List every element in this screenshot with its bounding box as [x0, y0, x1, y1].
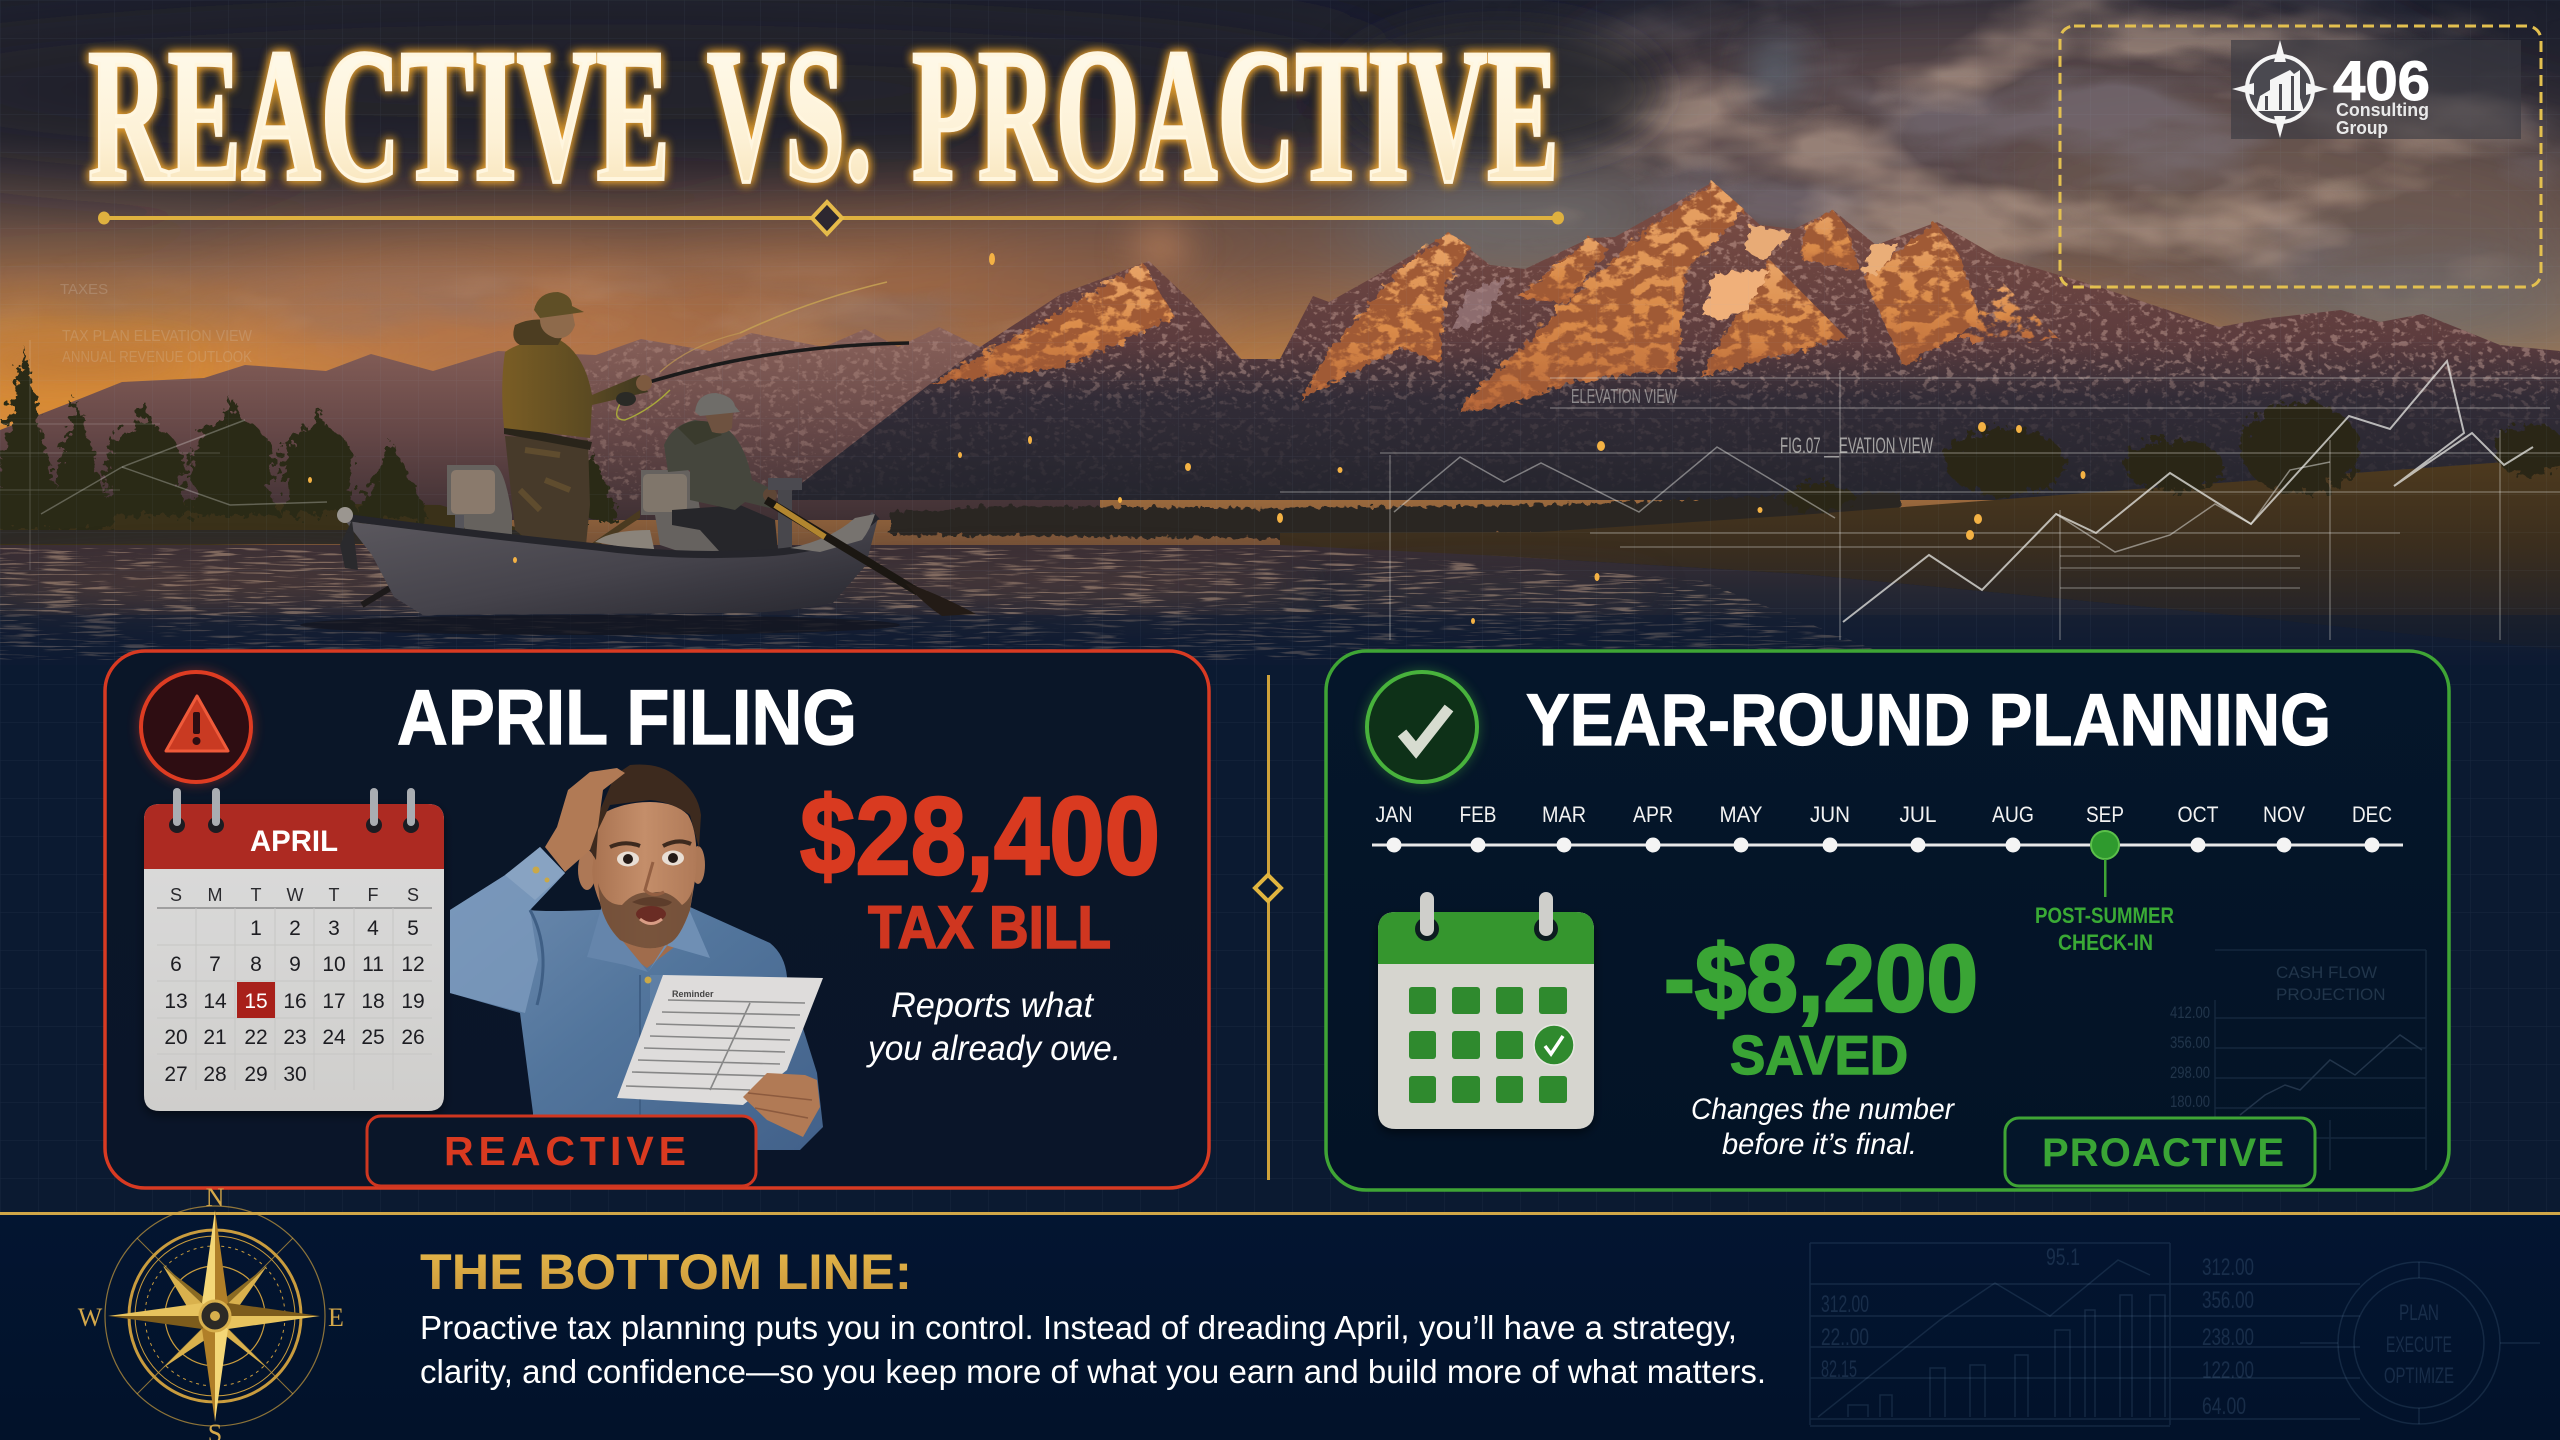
- bottom line band: 22..00: [1821, 1324, 1869, 1351]
- monthly timeline: JUL: [1900, 802, 1936, 827]
- blueprint labels on landscape: ANNUAL REVENUE OUTLOOK: [62, 349, 252, 366]
- front seat: [641, 470, 730, 555]
- tag: proactive: PROACTIVE: [2042, 1131, 2284, 1175]
- calendar: April with the 15th highlighted: 14: [203, 990, 227, 1013]
- background: sunset sky: [0, 0, 2560, 560]
- background: main mountain range: [780, 182, 2560, 500]
- bottom line band: 312.00: [2202, 1254, 2254, 1281]
- background: left shore trees: [0, 345, 620, 548]
- caption: reports what you already owe: you already owe.: [866, 1029, 1121, 1068]
- eyes and brows: [610, 841, 691, 866]
- calendar: April with the 15th highlighted: 20: [164, 1026, 188, 1049]
- calendar: April with the 15th highlighted: 10: [322, 953, 346, 976]
- face: [592, 802, 696, 948]
- rear seat: [447, 465, 512, 545]
- bottom line band: 312.00: [1821, 1291, 1869, 1318]
- heading: April filing: APRIL FILING: [397, 673, 857, 761]
- collar: [587, 905, 648, 972]
- calendar: April with the 15th highlighted: 28: [203, 1063, 227, 1086]
- calendar: April with the 15th highlighted: M: [208, 885, 222, 905]
- faint cash flow projection chart: 298.00: [2170, 1063, 2210, 1082]
- beard stubble: [598, 883, 693, 948]
- monthly timeline: NOV: [2263, 802, 2305, 827]
- oar left stub: [362, 585, 395, 605]
- calendar: April with the 15th highlighted: 26: [401, 1026, 425, 1049]
- floating ember sparkles: [308, 253, 2086, 624]
- text: bottom line message: Proactive tax planning puts you in control. Instead of dreading April, you’ll have a strategy,: [420, 1309, 1737, 1346]
- icon: compass with bar chart: [2232, 40, 2328, 138]
- calendar: April with the 15th highlighted: 22: [244, 1026, 268, 1049]
- calendar: April with the 15th highlighted: 5: [407, 917, 419, 940]
- blueprint labels on landscape: [60, 281, 1933, 458]
- logo placeholder dashed frame: [2060, 26, 2541, 287]
- faint cash flow projection chart: CASH FLOW: [2276, 963, 2377, 982]
- calendar: April with the 15th highlighted: 24: [322, 1026, 346, 1049]
- calendar: April with the 15th highlighted: 11: [362, 953, 384, 976]
- calendar: April with the 15th highlighted: 8: [250, 953, 262, 976]
- stat: amount saved: -$8,200: [1664, 926, 1978, 1032]
- faint cash flow projection chart: 356.00: [2170, 1033, 2210, 1052]
- tax form: Reminder: [672, 989, 714, 999]
- panel: April filing (reactive): [105, 651, 1209, 1188]
- icon: gold compass rose: E: [328, 1303, 344, 1332]
- monthly timeline: JUN: [1810, 802, 1850, 827]
- fishing rod: [646, 343, 909, 383]
- sunlit rock highlights: [930, 182, 2060, 410]
- tag: reactive: [367, 1116, 756, 1186]
- calendar: April with the 15th highlighted: 19: [401, 990, 425, 1013]
- callout: post-summer check-in: POST-SUMMER: [2035, 903, 2174, 928]
- caption: changes the number before it's final: [1691, 1093, 1955, 1161]
- calendar: April with the 15th highlighted: 15: [244, 990, 268, 1013]
- illustration: stressed man reading tax form: [450, 764, 823, 1150]
- calendar: April with the 15th highlighted: 2: [289, 917, 301, 940]
- blueprint labels on landscape: ELEVATION VIEW: [1571, 386, 1677, 408]
- calendar: April with the 15th highlighted: 3: [328, 917, 340, 940]
- monthly timeline: SEP: [2086, 802, 2124, 827]
- bottom line band: [0, 1183, 2560, 1440]
- faint cash flow projection chart: [2170, 950, 2426, 1170]
- faint financial blueprint drawings: [1810, 1243, 2540, 1426]
- calendar: green year-round: [1378, 892, 1594, 1129]
- shirt: [450, 847, 823, 1150]
- icon: warning triangle badge: [139, 670, 253, 784]
- calendar: April with the 15th highlighted: APRIL: [250, 825, 338, 858]
- faint cash flow projection chart: PROJECTION: [2276, 985, 2386, 1004]
- nose and mouth: [645, 862, 664, 895]
- calendar: April with the 15th highlighted: 25: [361, 1026, 385, 1049]
- bottom line band: EXECUTE: [2386, 1332, 2452, 1357]
- text: bottom line message: [420, 1309, 1766, 1390]
- bottom line band: 122.00: [2202, 1357, 2254, 1384]
- calendar: April with the 15th highlighted: 1: [250, 917, 262, 940]
- tag: proactive: [2005, 1118, 2315, 1186]
- oar: [766, 500, 976, 616]
- calendar: April with the 15th highlighted: 21: [203, 1026, 227, 1049]
- calendar: April with the 15th highlighted: 23: [283, 1026, 307, 1049]
- calendar: April with the 15th highlighted: [144, 788, 444, 1111]
- caption: changes the number before it's final: before it’s final.: [1722, 1128, 1917, 1161]
- seated angler: [664, 393, 802, 552]
- blueprint chart overlay on landscape: [0, 340, 2560, 640]
- icon: gold compass rose: [78, 1183, 344, 1440]
- stat label: saved: SAVED: [1730, 1024, 1908, 1086]
- monthly timeline: DEC: [2352, 802, 2392, 827]
- monthly timeline: MAR: [1542, 802, 1586, 827]
- calendar: April with the 15th highlighted: 27: [164, 1063, 188, 1086]
- logo: 406 Consulting Group: 406: [2333, 49, 2430, 112]
- background: right shore trees: [1782, 402, 2560, 511]
- calendar: April with the 15th highlighted: 9: [289, 953, 301, 976]
- bottom line band: 82.15: [1821, 1356, 1857, 1383]
- logo: 406 Consulting Group: [2231, 40, 2521, 139]
- blueprint labels on landscape: TAXES: [60, 281, 108, 298]
- hand on hair: [545, 768, 625, 872]
- calendar: April with the 15th highlighted: 30: [283, 1063, 307, 1086]
- tax form: [617, 975, 823, 1105]
- bottom line band: 95.1: [2046, 1244, 2080, 1271]
- calendar: April with the 15th highlighted: 13: [164, 990, 188, 1013]
- text: bottom line message: clarity, and confidence—so you keep more of what you earn and build more of what matters.: [420, 1353, 1766, 1390]
- calendar: April with the 15th highlighted: S: [170, 885, 182, 905]
- ears: [578, 850, 594, 890]
- icon: check mark badge: [1365, 670, 1479, 784]
- bottom line band: 238.00: [2202, 1324, 2254, 1351]
- calendar: April with the 15th highlighted: W: [286, 885, 304, 905]
- stat label: tax bill: TAX BILL: [868, 894, 1111, 961]
- hair: [590, 764, 701, 860]
- calendar: April with the 15th highlighted: 4: [367, 917, 379, 940]
- bottom line band: 356.00: [2202, 1287, 2254, 1314]
- illustration: drift boat with two anglers: [300, 282, 976, 635]
- caption: changes the number before it's final: Changes the number: [1691, 1093, 1955, 1126]
- title: [88, 11, 1559, 221]
- calendar: April with the 15th highlighted: 18: [361, 990, 385, 1013]
- hull: [343, 512, 878, 615]
- heading: year-round planning: YEAR-ROUND PLANNING: [1526, 680, 2331, 761]
- sunlit rock base: [930, 182, 1980, 410]
- neck: [623, 942, 674, 968]
- faint cash flow projection chart: 180.00: [2170, 1092, 2210, 1111]
- monthly timeline: AUG: [1992, 802, 2034, 827]
- calendar: April with the 15th highlighted: 17: [322, 990, 346, 1013]
- icon: gold compass rose: N: [206, 1183, 225, 1212]
- bottom line band: PLAN: [2399, 1300, 2439, 1325]
- bottom line band: OPTIMIZE: [2384, 1363, 2454, 1388]
- callout: post-summer check-in: [2035, 903, 2174, 955]
- sleeve highlights and creases: [450, 847, 565, 1013]
- calendar: April with the 15th highlighted: 16: [283, 990, 307, 1013]
- background: river with reflections: [0, 545, 2560, 665]
- background: distant treeline and right shore: [890, 458, 2560, 650]
- snowfields: [1702, 270, 1770, 320]
- background: far mountain range: [0, 327, 1100, 520]
- caption: reports what you already owe: [866, 986, 1121, 1068]
- title: VS.: [707, 11, 872, 221]
- heading: the bottom line: THE BOTTOM LINE:: [420, 1244, 912, 1300]
- monthly timeline: MAY: [1720, 802, 1763, 827]
- hand holding form: [743, 1073, 820, 1137]
- bottom line band: 64.00: [2202, 1393, 2246, 1420]
- calendar: April with the 15th highlighted: T: [328, 885, 340, 905]
- calendar: April with the 15th highlighted: S: [407, 885, 419, 905]
- standing angler: [502, 292, 652, 545]
- monthly timeline: FEB: [1460, 802, 1496, 827]
- blueprint labels on landscape: TAX PLAN ELEVATION VIEW: [62, 328, 253, 345]
- title: PROACTIVE: [912, 11, 1559, 221]
- icon: gold compass rose: W: [78, 1303, 103, 1332]
- logo: 406 Consulting Group: Group: [2336, 118, 2388, 138]
- caption: reports what you already owe: Reports what: [891, 986, 1094, 1025]
- tag: reactive: REACTIVE: [444, 1128, 686, 1174]
- panel: year-round planning (proactive): [1326, 651, 2449, 1190]
- callout: post-summer check-in: CHECK-IN: [2058, 930, 2153, 955]
- monthly timeline: APR: [1633, 802, 1673, 827]
- monthly timeline: JAN: [1376, 802, 1412, 827]
- calendar: April with the 15th highlighted: 7: [209, 953, 221, 976]
- title underline with diamond: [98, 202, 1564, 234]
- calendar: April with the 15th highlighted: T: [250, 885, 262, 905]
- title: REACTIVE: [88, 11, 670, 221]
- faint cash flow projection chart: 412.00: [2170, 1003, 2210, 1022]
- monthly timeline: OCT: [2178, 802, 2218, 827]
- calendar: April with the 15th highlighted: 29: [244, 1063, 268, 1086]
- calendar: April with the 15th highlighted: F: [368, 885, 378, 905]
- calendar: April with the 15th highlighted: 12: [401, 953, 425, 976]
- fly line: [740, 282, 887, 333]
- calendar: April with the 15th highlighted: 6: [170, 953, 182, 976]
- stat: tax bill amount: $28,400: [800, 775, 1160, 898]
- logo: 406 Consulting Group: Consulting: [2336, 100, 2429, 120]
- blueprint labels on landscape: FIG.07 __EVATION VIEW: [1780, 433, 1933, 458]
- oarlock and gear: [585, 510, 640, 548]
- monthly timeline: [1372, 802, 2403, 897]
- center divider with diamond: [1255, 675, 1281, 1180]
